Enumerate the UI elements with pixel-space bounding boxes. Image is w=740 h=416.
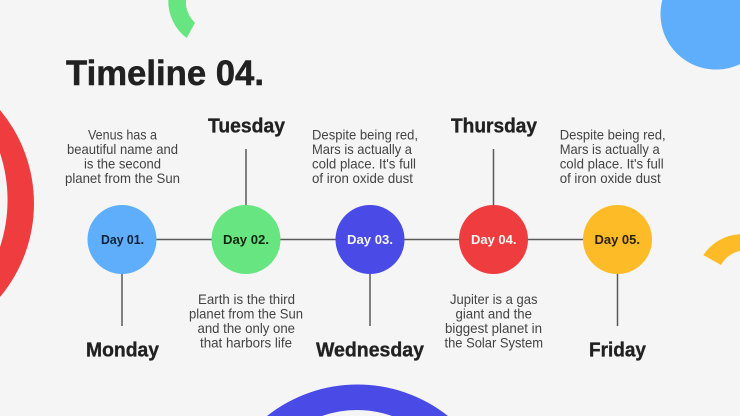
- decorative arc: green: [168, 0, 195, 38]
- text: Mars (column 5): [560, 128, 666, 186]
- text: Mars (column 3): of iron oxide dust: [312, 171, 413, 186]
- node: Day 03: [336, 205, 404, 274]
- text: Venus: is the second: [84, 156, 161, 172]
- node: Day 02: [212, 205, 280, 274]
- text: Earth: that harbors life: [200, 336, 292, 350]
- node: Day 01: Day 01.: [101, 232, 144, 247]
- heading: Monday: Monday: [86, 338, 160, 362]
- text: Earth: planet from the Sun: [189, 306, 303, 322]
- stem: Tuesday: [245, 149, 247, 206]
- title: Timeline 04.: [66, 53, 264, 93]
- heading: Thursday: Thursday: [451, 114, 538, 138]
- decorative ring: indigo: [267, 384, 448, 416]
- text: Mars (column 3): Mars is actually a: [312, 142, 412, 157]
- text: Venus: Venus has a: [88, 128, 157, 142]
- text: Mars (column 3): [312, 128, 418, 186]
- decorative ring: red: [0, 110, 34, 297]
- timeline connector: [122, 238, 617, 240]
- decorative arc: yellow: [703, 234, 740, 265]
- text: Venus: beautiful name and: [67, 142, 178, 157]
- text: Earth: and the only one: [198, 321, 295, 336]
- text: Jupiter: [444, 292, 543, 350]
- text: Mars (column 3): cold place. It's full: [312, 156, 416, 172]
- node: Day 03: Day 03.: [347, 232, 393, 247]
- node: Day 02: Day 02.: [223, 232, 269, 247]
- node: Day 05: Day 05.: [594, 232, 640, 247]
- text: Mars (column 3): Despite being red,: [312, 128, 418, 142]
- stem: Wednesday: [369, 273, 371, 326]
- node: Day 01: [88, 205, 156, 274]
- stem: Monday: [121, 273, 123, 326]
- text: Earth: Earth is the third: [198, 292, 295, 307]
- heading: Wednesday: Wednesday: [316, 338, 425, 362]
- text: Mars (column 5): of iron oxide dust: [560, 171, 661, 186]
- text: Jupiter: the Solar System: [444, 336, 543, 350]
- text: Jupiter: biggest planet in: [445, 321, 542, 336]
- text: Venus: [65, 128, 180, 186]
- text: Mars (column 5): Mars is actually a: [560, 142, 660, 157]
- node: Day 04: Day 04.: [471, 232, 516, 247]
- node: Day 04: [459, 205, 528, 274]
- text: Earth: [189, 292, 303, 350]
- stem: Friday: [616, 273, 618, 326]
- decorative circle: blue: [660, 0, 740, 70]
- stem: Thursday: [492, 149, 494, 206]
- text: Mars (column 5): cold place. It's full: [560, 156, 664, 172]
- text: Venus: planet from the Sun: [65, 171, 180, 186]
- heading: Friday: Friday: [589, 338, 647, 362]
- text: Mars (column 5): Despite being red,: [560, 128, 666, 142]
- text: Jupiter: Jupiter is a gas: [450, 292, 538, 307]
- text: Jupiter: giant and the: [456, 306, 532, 322]
- node: Day 05: [583, 205, 652, 274]
- heading: Tuesday: Tuesday: [208, 114, 286, 138]
